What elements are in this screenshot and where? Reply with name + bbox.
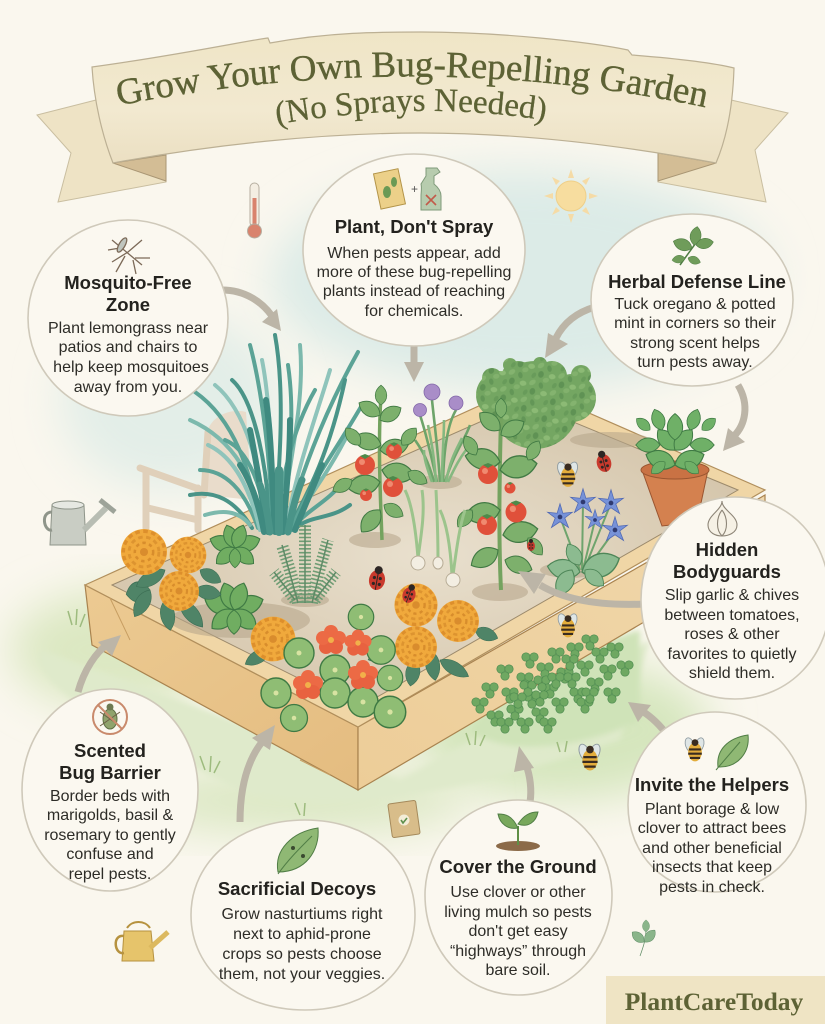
arrow: scented bbox=[78, 635, 121, 692]
icon: parsley bbox=[671, 226, 714, 266]
icon: leaf with bugs bbox=[277, 828, 318, 874]
icon: thermometer bbox=[248, 183, 262, 238]
text: plant: Plant, Don't Spray bbox=[335, 216, 494, 237]
panel: mosquito-free zone bbox=[28, 220, 228, 416]
text: cover: Use clover or other bbox=[450, 884, 586, 901]
text: herbal: strong scent helps bbox=[630, 335, 760, 352]
plant: rosemary bbox=[274, 525, 336, 603]
text: invite: Plant borage & low bbox=[645, 801, 780, 818]
panel: sacrificial decoys bbox=[191, 820, 415, 1010]
top rim bbox=[85, 385, 765, 727]
text: herbal: Tuck oregano & potted bbox=[614, 296, 776, 313]
text: hidden: between tomatoes, bbox=[664, 607, 800, 624]
text: cover: don't get easy bbox=[468, 923, 568, 940]
text: herbal: mint in corners so their bbox=[614, 315, 777, 332]
icon: garlic bbox=[708, 501, 737, 536]
text: hidden: Bodyguards bbox=[673, 561, 781, 582]
text: hidden: roses & other bbox=[684, 626, 780, 643]
plant: potted mint bbox=[633, 407, 719, 526]
panel: hidden bodyguards bbox=[641, 497, 825, 699]
plant: borage bbox=[546, 489, 627, 599]
arrow: hidden to plants bbox=[518, 571, 645, 604]
text: invite: Invite the Helpers bbox=[635, 774, 789, 795]
panel: invite the helpers bbox=[628, 712, 806, 896]
text: invite: clover to attract bees bbox=[638, 820, 786, 837]
text: sacrificial bbox=[218, 878, 385, 983]
arrow: mosquito to lemongrass bbox=[222, 290, 281, 331]
text: herbal bbox=[608, 271, 786, 371]
text: scented: repel pests. bbox=[69, 866, 151, 883]
grass tufts bbox=[68, 609, 567, 816]
icon: seed bag bbox=[388, 800, 420, 838]
text: herbal: Herbal Defense Line bbox=[608, 271, 786, 292]
right wall bbox=[358, 495, 765, 790]
text: mosquito: away from you. bbox=[74, 379, 182, 396]
icon: sun bbox=[544, 169, 598, 223]
text: invite: and other beneficial bbox=[642, 840, 782, 857]
text: scented: confuse and bbox=[66, 846, 154, 863]
text: hidden: shield them. bbox=[689, 665, 775, 682]
text: cover: “highways” through bbox=[450, 943, 586, 960]
icon: seed packet and spray: + bbox=[411, 182, 418, 196]
text: cover: bare soil. bbox=[486, 962, 550, 979]
text: scented: Scented bbox=[74, 740, 146, 761]
text: mosquito: patios and chairs to bbox=[59, 339, 197, 356]
text: invite: pests in check. bbox=[659, 879, 765, 896]
title text: Grow Your Own Bug-Repelling Garden bbox=[117, 52, 706, 108]
brand footer bbox=[606, 976, 825, 1024]
text: sacrificial: Sacrificial Decoys bbox=[218, 878, 376, 899]
plant: clover patch bbox=[472, 635, 633, 733]
plant: oregano bbox=[476, 357, 596, 449]
plant: tomato left bbox=[330, 385, 430, 540]
left wall bbox=[85, 585, 358, 790]
text: sacrificial: next to aphid-prone bbox=[233, 926, 371, 943]
plant: chives bbox=[414, 384, 470, 482]
plant: basil bbox=[202, 523, 266, 635]
arrow: sacrificial bbox=[240, 725, 275, 822]
text: plant: more of these bug-repelling bbox=[317, 264, 511, 281]
text: scented: Border beds with bbox=[50, 788, 170, 805]
text: plant: plants instead of reaching bbox=[323, 283, 505, 300]
text: plant: for chemicals. bbox=[365, 303, 463, 320]
arrow: cover bbox=[514, 746, 534, 802]
text: mosquito bbox=[48, 272, 209, 396]
text: scented: marigolds, basil & bbox=[47, 807, 173, 824]
text: invite: insects that keep bbox=[652, 859, 772, 876]
panel: scented bug barrier bbox=[22, 689, 198, 891]
icon: bug with no symbol bbox=[93, 700, 127, 734]
text: cover: Cover the Ground bbox=[439, 856, 597, 877]
arrow: plant down bbox=[404, 338, 424, 382]
plant: nasturtiums bbox=[261, 604, 406, 732]
icon: watering can gold bbox=[116, 922, 168, 961]
plant: garlic bbox=[405, 490, 465, 587]
panel: herbal defense line bbox=[591, 214, 793, 386]
text: mosquito: Zone bbox=[106, 294, 150, 315]
text: plant: When pests appear, add bbox=[327, 245, 501, 262]
icon: mosquito bbox=[108, 237, 150, 274]
text: mosquito: Mosquito-Free bbox=[64, 272, 192, 293]
text: sacrificial: Grow nasturtiums right bbox=[222, 906, 383, 923]
icon: seed packet and spray bbox=[374, 168, 441, 210]
title banner bbox=[36, 31, 789, 203]
panel: plant, don't spray bbox=[303, 154, 525, 346]
icon: watering can bbox=[44, 500, 115, 545]
text: plant bbox=[317, 216, 511, 320]
text: herbal: turn pests away. bbox=[637, 354, 753, 371]
text: cover: living mulch so pests bbox=[444, 904, 592, 921]
text: cover bbox=[439, 856, 597, 979]
icon: small sprig bbox=[629, 920, 658, 956]
banner folds bbox=[113, 153, 716, 181]
text: sacrificial: them, not your veggies. bbox=[219, 966, 385, 983]
text: invite bbox=[635, 774, 789, 896]
icon: chair bbox=[140, 411, 252, 530]
text: hidden bbox=[664, 539, 800, 682]
plant: marigolds front bbox=[242, 583, 500, 687]
text: hidden: Slip garlic & chives bbox=[665, 587, 799, 604]
icon: sprout bbox=[496, 812, 540, 851]
brand footer: PlantCareToday bbox=[625, 987, 804, 1016]
text: scented: rosemary to gently bbox=[44, 827, 176, 844]
text: hidden: favorites to quietly bbox=[668, 646, 796, 663]
bees bbox=[556, 461, 602, 770]
panel: cover the ground bbox=[425, 800, 612, 995]
subtitle text: (No Sprays Needed) bbox=[276, 89, 546, 130]
text: mosquito: Plant lemongrass near bbox=[48, 320, 209, 337]
arrow: herbal to oregano bbox=[545, 307, 595, 358]
left banner tail bbox=[37, 100, 166, 202]
text: scented: Bug Barrier bbox=[59, 762, 161, 783]
arrow: invite bbox=[628, 702, 668, 736]
arrow: herbal to pot bbox=[723, 385, 745, 451]
soil bbox=[112, 402, 738, 708]
right banner tail bbox=[658, 100, 788, 202]
ladybugs bbox=[367, 449, 613, 605]
text: sacrificial: crops so pests choose bbox=[222, 946, 382, 963]
raised garden bed bbox=[85, 385, 765, 790]
plant: tomato right bbox=[453, 398, 547, 590]
banner body bbox=[92, 32, 734, 163]
plant: lemongrass bbox=[190, 335, 362, 532]
icon: bee and leaf bbox=[683, 735, 748, 770]
text: mosquito: help keep mosquitoes bbox=[53, 359, 209, 376]
text: scented bbox=[44, 740, 176, 883]
text: hidden: Hidden bbox=[696, 539, 758, 560]
plant: marigolds left bbox=[121, 529, 224, 632]
